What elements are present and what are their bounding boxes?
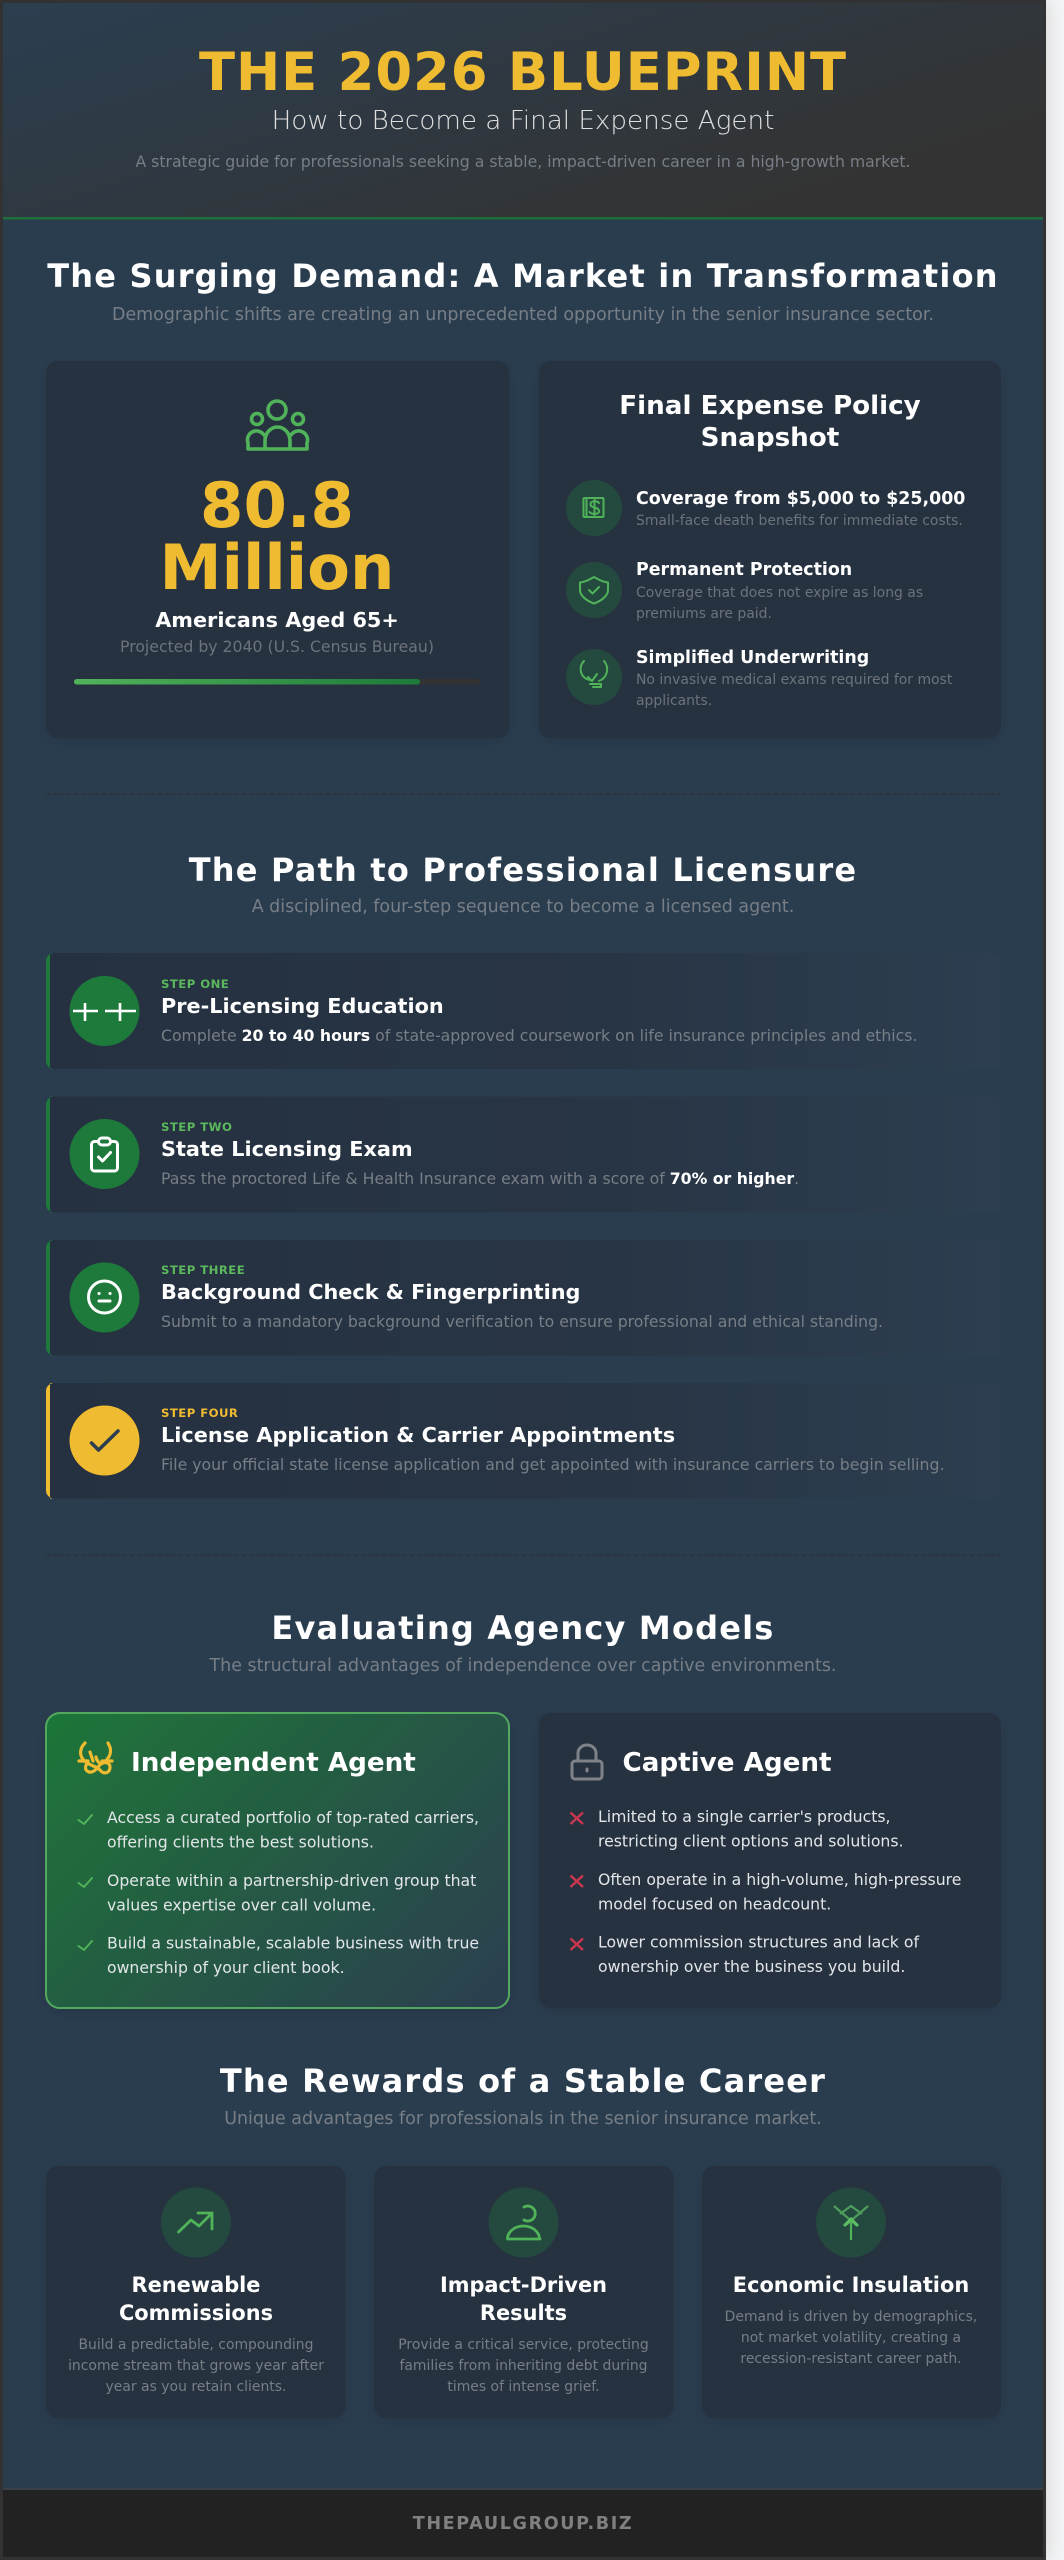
step one: STEP ONE bbox=[161, 977, 229, 991]
reward card: impact-driven results: Results bbox=[480, 2301, 567, 2325]
drawbacks list bbox=[570, 1807, 961, 1976]
section subheading: A disciplined, four-step sequence to become a licensed agent. bbox=[252, 897, 794, 917]
icon: shield bbox=[580, 577, 608, 604]
item: permanent protection: premiums are paid. bbox=[636, 606, 772, 622]
drawbacks list: Lower commission structures and lack of bbox=[598, 1932, 919, 1952]
benefits list: Access a curated portfolio of top-rated carriers, bbox=[107, 1808, 479, 1827]
panel: captive agent bbox=[539, 1713, 1001, 2008]
drawbacks list: restricting client options and solutions. bbox=[598, 1832, 904, 1850]
icon: neutral face bbox=[88, 1281, 120, 1313]
section heading: rewards: The Rewards of a Stable Career bbox=[220, 2062, 826, 2100]
icon: underwriting bbox=[581, 661, 607, 687]
section heading: licensure bbox=[189, 851, 857, 917]
icon: person bbox=[508, 2206, 540, 2239]
progress bar bbox=[74, 679, 480, 684]
section subheading: The structural advantages of independence over captive environments. bbox=[209, 1656, 836, 1676]
stat number: 80.8 bbox=[200, 469, 354, 542]
step one: Pre-Licensing Education bbox=[161, 994, 444, 1018]
reward card: renewable commissions: Renewable bbox=[132, 2273, 260, 2297]
item: coverage: Small-face death benefits for immediate costs. bbox=[636, 513, 963, 529]
item: coverage bbox=[566, 480, 965, 536]
tagline: A strategic guide for professionals seeking a stable, impact-driven career in a high-growth market. bbox=[135, 152, 911, 171]
reward card: economic insulation bbox=[702, 2166, 1001, 2418]
section subheading: Demographic shifts are creating an unprecedented opportunity in the senior insurance sector. bbox=[112, 305, 934, 325]
step two: STEP TWO bbox=[161, 1120, 232, 1134]
step three: Submit to a mandatory background verification to ensure professional and ethical standing. bbox=[161, 1312, 883, 1331]
benefits list: ownership of your client book. bbox=[107, 1958, 345, 1977]
item: permanent protection: Permanent Protection bbox=[636, 560, 852, 580]
item: simplified underwriting bbox=[566, 648, 953, 709]
reward card: economic insulation: not market volatility, creating a bbox=[741, 2330, 961, 2346]
stat number: Million bbox=[160, 531, 394, 604]
section heading: surging demand bbox=[47, 257, 999, 325]
footer: THEPAULGROUP.BIZ bbox=[413, 2514, 633, 2534]
section heading: rewards bbox=[220, 2062, 826, 2129]
item: permanent protection bbox=[566, 560, 923, 622]
section heading: surging demand: The Surging Demand: A Market in Transformation bbox=[47, 257, 999, 295]
step one: Complete 20 to 40 hours of state-approved coursework on life insurance principles and ethics. bbox=[161, 1026, 917, 1045]
item: coverage: Coverage from $5,000 to $25,000 bbox=[636, 489, 965, 509]
section heading: agency models: Evaluating Agency Models bbox=[271, 1609, 775, 1647]
icon: trending up bbox=[178, 2213, 212, 2232]
benefits list: Build a sustainable, scalable business with true bbox=[107, 1934, 479, 1952]
step two: Pass the proctored Life & Health Insurance exam with a score of 70% or higher. bbox=[161, 1169, 799, 1188]
reward card: renewable commissions: Commissions bbox=[119, 2301, 273, 2325]
icon: economic arrow bbox=[834, 2206, 868, 2240]
reward card: impact-driven results: Provide a critical service, protecting bbox=[398, 2337, 649, 2353]
reward card: impact-driven results: families from inheriting debt during bbox=[399, 2358, 648, 2374]
benefits list bbox=[78, 1808, 479, 1977]
section heading: agency models bbox=[209, 1609, 836, 1676]
drawbacks list: Limited to a single carrier's products, bbox=[598, 1807, 891, 1826]
reward card: renewable commissions: year as you retain clients. bbox=[106, 2379, 286, 2395]
reward card: impact-driven results: Impact-Driven bbox=[440, 2273, 607, 2297]
panel: independent agent bbox=[46, 1713, 509, 2008]
step three: STEP THREE bbox=[161, 1263, 245, 1277]
item: simplified underwriting: Simplified Underwriting bbox=[636, 648, 869, 668]
drawbacks list: model focused on headcount. bbox=[598, 1894, 831, 1914]
step two: State Licensing Exam bbox=[161, 1137, 413, 1161]
step two bbox=[46, 1096, 1001, 1212]
step three bbox=[46, 1240, 1001, 1356]
drawbacks list: Often operate in a high-volume, high-pressure bbox=[598, 1870, 961, 1889]
reward card: renewable commissions: Build a predictable, compounding bbox=[79, 2337, 313, 2353]
item: simplified underwriting: No invasive medical exams required for most bbox=[636, 672, 953, 688]
icon: people group bbox=[247, 401, 308, 449]
section subheading: Unique advantages for professionals in the senior insurance market. bbox=[224, 2109, 822, 2129]
stat label: Americans Aged 65+ bbox=[155, 608, 399, 632]
step three: Background Check & Fingerprinting bbox=[161, 1280, 580, 1304]
item: permanent protection: Coverage that does not expire as long as bbox=[636, 585, 923, 601]
panel: policy snapshot bbox=[539, 361, 1001, 738]
heading: Independent Agent bbox=[131, 1748, 416, 1778]
reward card: renewable commissions: income stream that grows year after bbox=[68, 2358, 324, 2374]
step four bbox=[46, 1383, 1001, 1498]
heading: Captive Agent bbox=[622, 1748, 832, 1778]
footer bbox=[3, 2488, 1043, 2557]
header bbox=[3, 3, 1043, 220]
reward card: impact-driven results: times of intense grief. bbox=[447, 2379, 600, 2395]
icon: check bbox=[92, 1431, 118, 1450]
benefits list: offering clients the best solutions. bbox=[107, 1832, 374, 1852]
title: THE 2026 BLUEPRINT bbox=[199, 42, 847, 103]
reward card: renewable commissions bbox=[46, 2166, 346, 2418]
step four: License Application & Carrier Appointments bbox=[161, 1423, 675, 1447]
icon: lock bbox=[572, 1745, 602, 1779]
icon: money bbox=[584, 498, 604, 517]
icon: plus signs bbox=[73, 1003, 136, 1021]
reward card: economic insulation: Economic Insulation bbox=[733, 2273, 969, 2297]
benefits list: values expertise over call volume. bbox=[107, 1896, 376, 1914]
reward card: economic insulation: recession-resistant career path. bbox=[740, 2351, 962, 2367]
item: simplified underwriting: applicants. bbox=[636, 693, 712, 709]
benefits list: Operate within a partnership-driven group that bbox=[107, 1871, 476, 1890]
step four: STEP FOUR bbox=[161, 1406, 238, 1420]
icon: antlers bbox=[79, 1743, 112, 1773]
reward card: economic insulation: Demand is driven by demographics, bbox=[725, 2309, 977, 2325]
stat source: Projected by 2040 (U.S. Census Bureau) bbox=[120, 637, 434, 656]
drawbacks list: ownership over the business you build. bbox=[598, 1957, 905, 1976]
reward card: impact-driven results bbox=[374, 2166, 674, 2418]
icon: clipboard check bbox=[92, 1138, 118, 1171]
panel heading: Snapshot bbox=[701, 423, 839, 453]
panel: 80.8 million stat bbox=[46, 361, 509, 738]
step one bbox=[46, 953, 1001, 1069]
step four: File your official state license application and get appointed with insurance carriers to begin selling. bbox=[161, 1455, 944, 1474]
panel heading: Final Expense Policy bbox=[619, 391, 921, 421]
subtitle: How to Become a Final Expense Agent bbox=[272, 106, 774, 136]
section heading: licensure: The Path to Professional Licensure bbox=[189, 851, 857, 889]
